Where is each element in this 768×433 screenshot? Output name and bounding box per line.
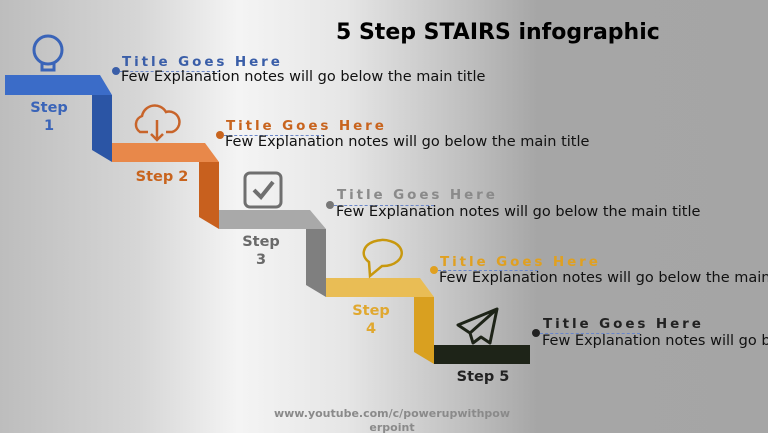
icon: paper plane bbox=[458, 309, 497, 343]
text block 2 bbox=[216, 118, 589, 150]
text: Step 5 bbox=[457, 369, 509, 385]
text block 3 bbox=[326, 187, 700, 220]
text: Step bbox=[242, 234, 280, 250]
text: 4 bbox=[366, 321, 376, 337]
step 3 bbox=[219, 210, 326, 297]
title: 5 Step STAIRS infographic bbox=[336, 20, 660, 45]
text block 1 bbox=[112, 54, 485, 85]
text: Few Explanation notes will go below the main title bbox=[121, 69, 485, 85]
text: Title Goes Here bbox=[226, 118, 387, 134]
text: Title Goes Here bbox=[440, 254, 601, 270]
step 5 bbox=[434, 345, 530, 364]
text: Step bbox=[352, 303, 390, 319]
text: Title Goes Here bbox=[543, 316, 704, 332]
text: Few Explanation notes will go below the main title bbox=[336, 204, 700, 220]
text: 3 bbox=[256, 252, 266, 268]
step labels: 1 bbox=[44, 118, 54, 134]
step labels: Step bbox=[30, 100, 68, 116]
icon: speech bubble bbox=[364, 240, 402, 276]
text: Title Goes Here bbox=[337, 187, 498, 203]
text: Title Goes Here bbox=[122, 54, 283, 70]
text: Few Explanation notes will go below the main title bbox=[225, 134, 589, 150]
step labels bbox=[30, 100, 68, 134]
step 1 bbox=[5, 75, 112, 162]
icon: light bulb bbox=[34, 36, 62, 70]
text: Step 2 bbox=[136, 169, 188, 185]
text block 4 bbox=[430, 254, 768, 286]
step 2 bbox=[112, 143, 219, 229]
text block 5 bbox=[532, 316, 768, 349]
icon: checkbox bbox=[245, 173, 281, 207]
step 4 bbox=[326, 278, 434, 364]
icon: cloud download bbox=[136, 106, 179, 140]
